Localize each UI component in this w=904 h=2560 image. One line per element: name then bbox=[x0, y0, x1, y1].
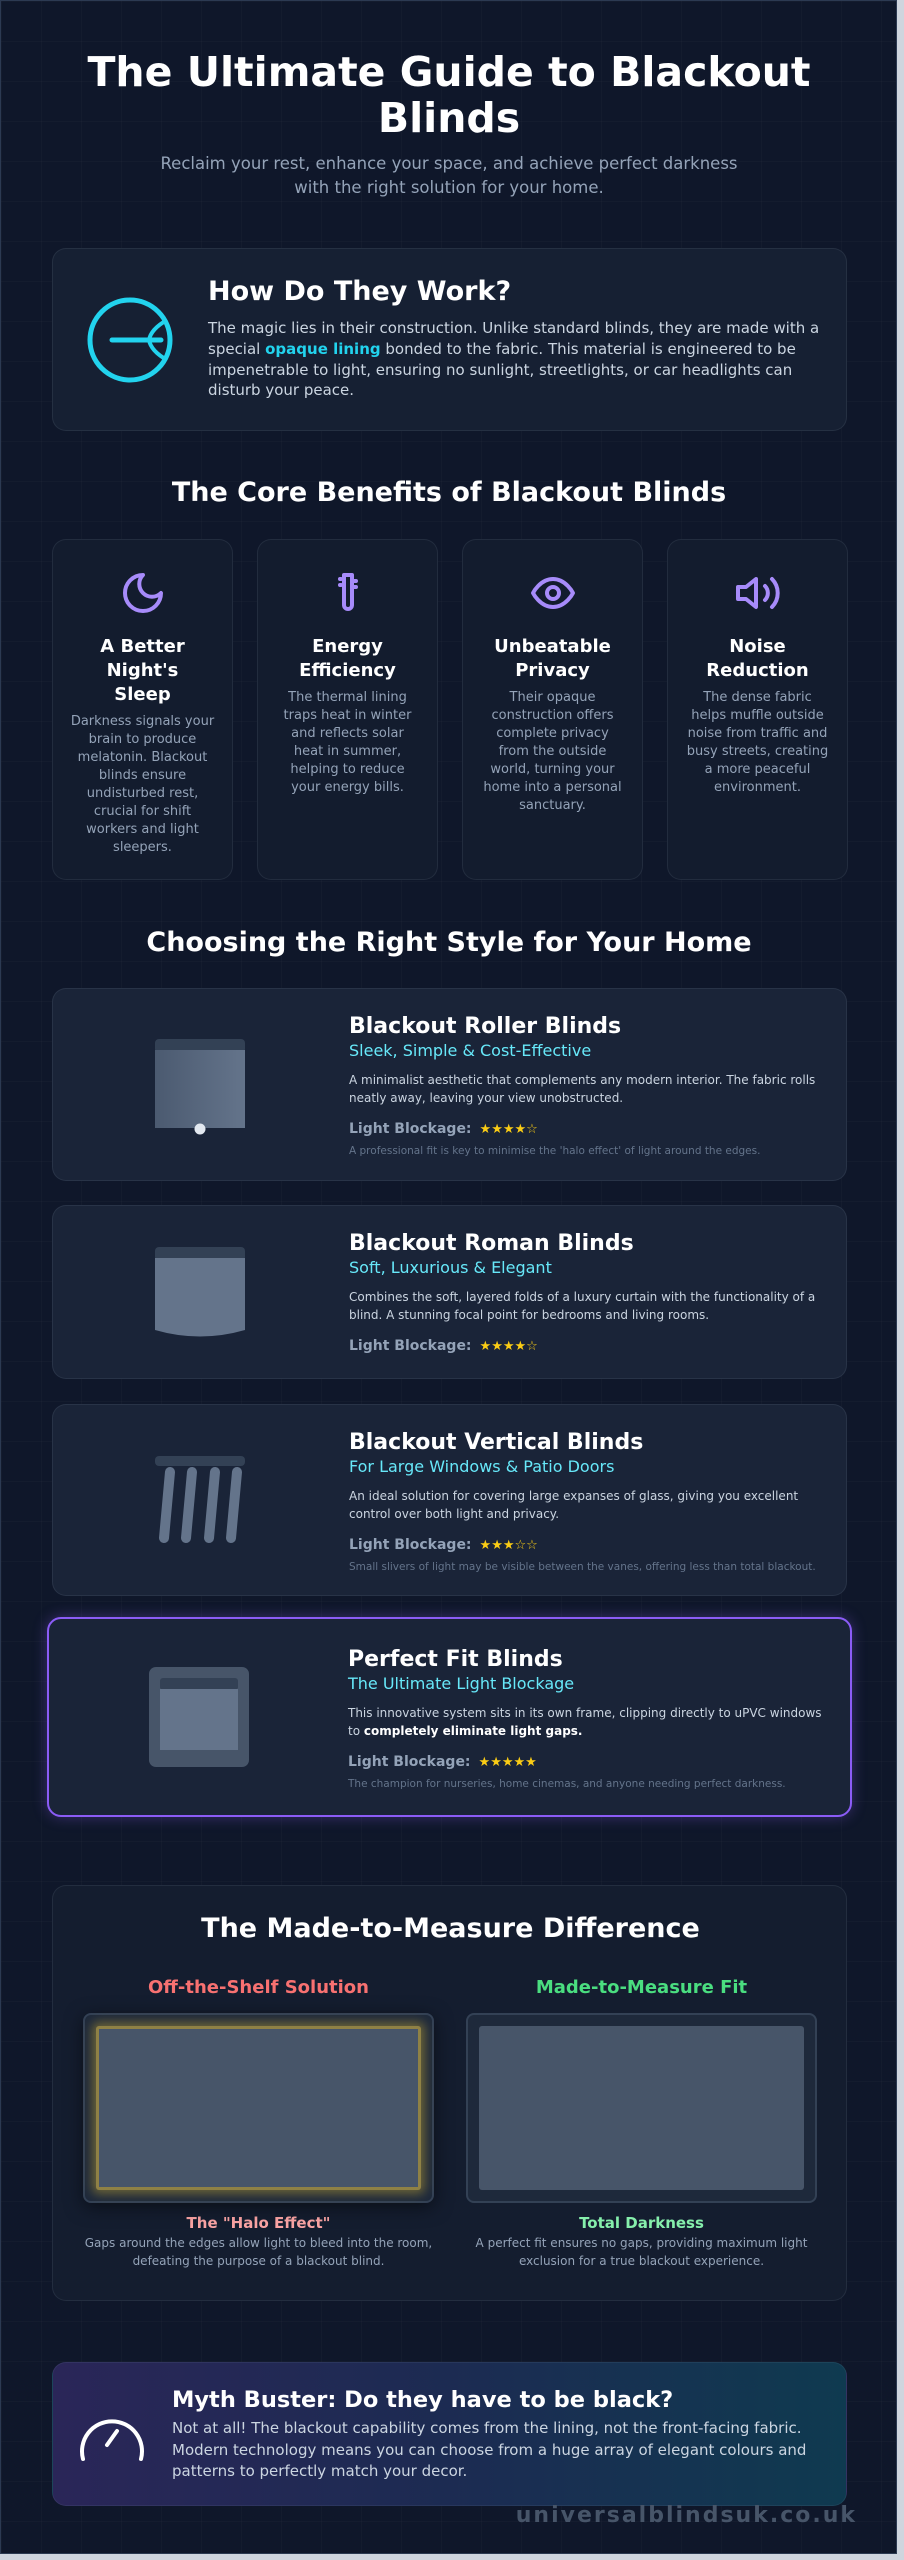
panel: benefit noise: noise from traffic and bbox=[688, 726, 827, 741]
panel: roller blinds: A professional fit is key to minimise the 'halo effect' of light around the edges. bbox=[349, 1145, 760, 1157]
panel: benefit privacy: construction offers bbox=[491, 708, 614, 723]
text: how it works: How Do They Work? bbox=[208, 276, 511, 307]
panel: perfect fit blinds: This innovative system sits in its own frame, clipping directly to uPVC windows bbox=[348, 1706, 822, 1720]
panel: benefit energy: Energy bbox=[312, 636, 383, 657]
panel: perfect fit blinds: Light Blockage: ★★★★★ bbox=[348, 1754, 537, 1770]
panel: roman blinds: Blackout Roman Blinds bbox=[349, 1231, 634, 1256]
panel: perfect fit blinds: Perfect Fit Blinds bbox=[348, 1647, 563, 1672]
panel: benefit privacy: Unbeatable bbox=[494, 636, 611, 657]
text: how it works bbox=[208, 276, 819, 399]
heading: made-to-measure: The Made-to-Measure Difference bbox=[201, 1913, 700, 1944]
column: made-to-measure: A perfect fit ensures no gaps, providing maximum light bbox=[476, 2236, 807, 2250]
panel: roller blinds: Blackout Roller Blinds bbox=[349, 1014, 621, 1039]
panel: benefit privacy: Privacy bbox=[515, 660, 590, 681]
column: off-the-shelf: Off-the-Shelf Solution bbox=[148, 1977, 369, 1998]
panel: benefit privacy: Their opaque bbox=[510, 690, 595, 705]
subtitle: Reclaim your rest, enhance your space, and achieve perfect darkness bbox=[160, 154, 738, 173]
panel: how do they work bbox=[52, 248, 847, 431]
icon: thermometer bbox=[338, 573, 358, 611]
panel: benefit sleep: blinds ensure bbox=[99, 768, 186, 783]
panel: vertical blinds bbox=[52, 1404, 847, 1596]
panel: benefit privacy: home into a personal bbox=[483, 780, 622, 795]
panel: benefit energy: and reflects solar bbox=[291, 726, 404, 741]
panel: benefit energy: traps heat in winter bbox=[284, 708, 411, 723]
panel: perfect fit blinds: The Ultimate Light Blockage bbox=[348, 1674, 574, 1693]
column: off-the-shelf: The "Halo Effect" bbox=[187, 2214, 330, 2232]
panel: vertical blinds: Small slivers of light may be visible between the vanes, offering less than total blackout. bbox=[349, 1561, 816, 1573]
panel: perfect fit blinds: to completely eliminate light gaps. bbox=[348, 1724, 582, 1738]
panel: roller blinds bbox=[52, 988, 847, 1181]
panel: benefit energy: heat in summer, bbox=[294, 744, 401, 759]
panel: benefit energy: your energy bills. bbox=[291, 780, 404, 795]
panel: benefit sleep: A Better bbox=[100, 636, 185, 657]
subtitle: with the right solution for your home. bbox=[294, 178, 604, 196]
panel: benefit noise: a more peaceful bbox=[705, 762, 810, 777]
panel: benefit privacy: complete privacy bbox=[496, 726, 609, 741]
panel: vertical blinds: Light Blockage: ★★★☆☆ bbox=[349, 1537, 538, 1553]
column: off-the-shelf: defeating the purpose of a blackout blind. bbox=[133, 2254, 384, 2268]
text: myth buster bbox=[172, 2387, 806, 2480]
panel: benefit energy: The thermal lining bbox=[288, 690, 407, 705]
column: made-to-measure: exclusion for a true blackout experience. bbox=[519, 2254, 764, 2268]
panel: roman blinds: Soft, Luxurious & Elegant bbox=[349, 1258, 552, 1277]
column: off-the-shelf bbox=[79, 1977, 438, 2268]
icon: roller blind bbox=[155, 1039, 245, 1134]
panel: benefit noise: Noise bbox=[729, 636, 786, 657]
panel: benefit noise: busy streets, creating bbox=[687, 744, 828, 759]
heading: core benefits: The Core Benefits of Blackout Blinds bbox=[172, 477, 726, 508]
panel: roman blinds: Combines the soft, layered folds of a luxury curtain with the functionality of a bbox=[349, 1290, 815, 1304]
panel: myth buster bbox=[52, 2362, 847, 2506]
panel: benefit noise: The dense fabric bbox=[703, 690, 812, 705]
panel: benefit sleep: undisturbed rest, bbox=[87, 786, 198, 801]
panel: roller blinds: A minimalist aesthetic that complements any modern interior. The fabric rolls bbox=[349, 1073, 815, 1087]
panel: benefit sleep: brain to produce bbox=[89, 732, 196, 747]
panel: benefit noise bbox=[667, 539, 848, 880]
panel: benefit sleep: sleepers. bbox=[113, 840, 172, 855]
icon: speaker bbox=[736, 576, 780, 610]
panel: benefit privacy bbox=[462, 539, 643, 880]
panel: benefit sleep: Darkness signals your bbox=[71, 714, 214, 729]
panel: vertical blinds: An ideal solution for covering large expanses of glass, giving you excellent bbox=[349, 1489, 798, 1503]
subtitle bbox=[160, 154, 738, 196]
panel: benefit noise: helps muffle outside bbox=[691, 708, 824, 723]
icon: eye bbox=[531, 577, 575, 609]
icon: perfect fit blind bbox=[149, 1667, 249, 1767]
panel: benefit sleep: melatonin. Blackout bbox=[78, 750, 207, 765]
icon: vertical blind bbox=[155, 1456, 245, 1543]
watermark: universalblindsuk.co.uk bbox=[516, 2503, 857, 2528]
column: made-to-measure: Total Darkness bbox=[579, 2214, 704, 2232]
icon: moon bbox=[123, 573, 163, 613]
panel: roman blinds: Light Blockage: ★★★★☆ bbox=[349, 1338, 538, 1354]
heading: choosing style: Choosing the Right Style for Your Home bbox=[146, 927, 752, 958]
panel: made-to-measure difference bbox=[52, 1885, 847, 2301]
icon: lining bbox=[88, 298, 172, 382]
panel: benefit energy bbox=[257, 539, 438, 880]
panel: benefit energy: helping to reduce bbox=[290, 762, 405, 777]
panel: benefit sleep: crucial for shift bbox=[94, 804, 191, 819]
text: myth buster: Myth Buster: Do they have to be black? bbox=[172, 2387, 673, 2413]
panel: roman blinds: blind. A stunning focal point for bedrooms and living rooms. bbox=[349, 1308, 709, 1322]
illustration: perfect window bbox=[466, 2013, 817, 2203]
panel: roller blinds: Light Blockage: ★★★★☆ bbox=[349, 1121, 538, 1137]
illustration: halo window bbox=[83, 2013, 434, 2203]
panel: benefit sleep: Sleep bbox=[114, 684, 171, 705]
panel: benefit energy: Efficiency bbox=[299, 660, 396, 681]
text: myth buster: Not at all! The blackout capability comes from the lining, not the front-facing fabric. Modern technology means you can choose from a huge array of elegant colours and patterns to perfectly match your decor. bbox=[172, 2419, 806, 2480]
panel: benefit privacy: sanctuary. bbox=[519, 798, 586, 813]
panel: benefit sleep bbox=[52, 539, 233, 880]
panel: perfect fit blinds bbox=[47, 1617, 852, 1817]
panel: roller blinds: Sleek, Simple & Cost-Effective bbox=[349, 1041, 591, 1060]
icon: roman blind bbox=[155, 1247, 245, 1336]
panel: benefit sleep: Night's bbox=[107, 660, 178, 681]
title: The Ultimate Guide to Blackout Blinds bbox=[87, 48, 811, 142]
panel: vertical blinds: Blackout Vertical Blinds bbox=[349, 1430, 643, 1455]
panel: benefit noise: Reduction bbox=[706, 660, 809, 681]
panel: benefit privacy: from the outside bbox=[499, 744, 606, 759]
panel: vertical blinds: For Large Windows & Patio Doors bbox=[349, 1457, 614, 1476]
panel: vertical blinds: control over both light and privacy. bbox=[349, 1507, 559, 1521]
text: how it works: The magic lies in their construction. Unlike standard blinds, they are made with a special opaque lining bonded to the fabric. This material is engineered to be impenetrable to light, ensuring no sunlight, streetlights, or car headlights can disturb your peace. bbox=[208, 319, 819, 399]
panel: benefit noise: environment. bbox=[714, 780, 801, 795]
panel: roman blinds bbox=[52, 1205, 847, 1379]
column: off-the-shelf: Gaps around the edges allow light to bleed into the room, bbox=[85, 2236, 432, 2250]
panel: benefit privacy: world, turning your bbox=[490, 762, 615, 777]
panel: benefit sleep: workers and light bbox=[86, 822, 199, 837]
column: made-to-measure: Made-to-Measure Fit bbox=[536, 1977, 747, 1998]
panel: perfect fit blinds: The champion for nurseries, home cinemas, and anyone needing perfect darkness. bbox=[348, 1778, 786, 1790]
icon: gauge bbox=[80, 2419, 144, 2461]
panel: roller blinds: neatly away, leaving your view unobstructed. bbox=[349, 1091, 623, 1105]
column: made-to-measure bbox=[466, 1977, 817, 2268]
